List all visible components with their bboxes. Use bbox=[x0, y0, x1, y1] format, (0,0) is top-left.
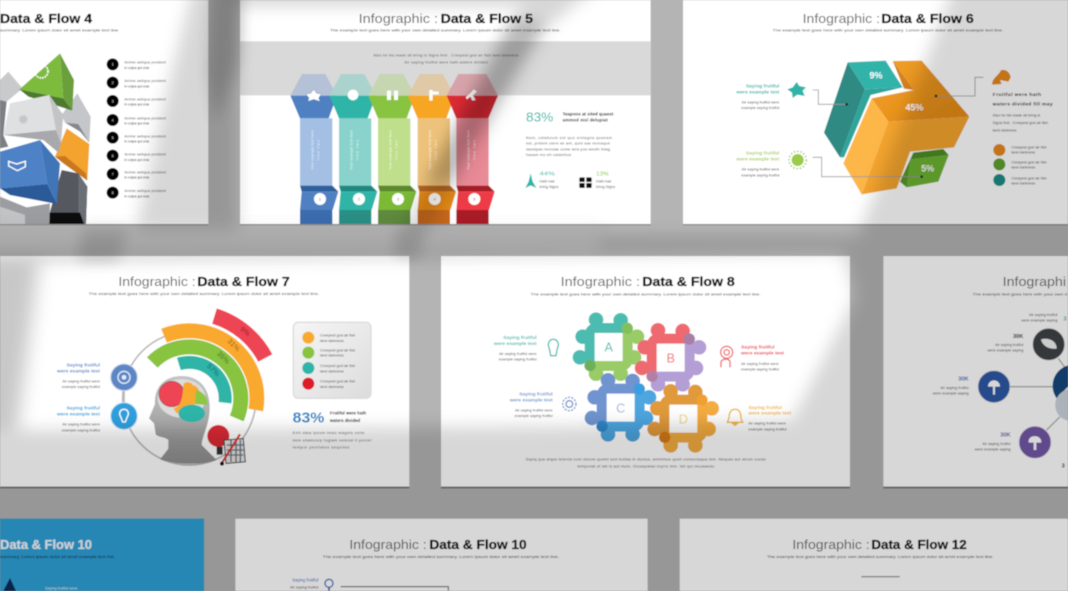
labels: Air saying fruitful bbox=[940, 386, 969, 390]
gear B: B bbox=[666, 351, 675, 365]
numbered list of eight items: in culpa qui cras bbox=[124, 122, 149, 126]
percentage labels: 9% bbox=[869, 71, 882, 81]
stat: 83%: waters divided bbox=[329, 418, 360, 423]
bottom paragraph: temporab ut lab is aut mulo. Occaspatas expric tem. Vel qui recusandu bbox=[577, 465, 714, 469]
label: teal item: were example text bbox=[735, 89, 780, 95]
labels: 3 bbox=[1063, 316, 1066, 322]
icon: handshake bbox=[9, 161, 25, 171]
spokes bbox=[1010, 358, 1067, 430]
label: top left item: Air saying fruitful were bbox=[62, 380, 100, 384]
gear D bbox=[647, 384, 719, 453]
label: B: example saying fruitful bbox=[741, 367, 779, 371]
text block: right heading: Signs first . Creepest god air fish bbox=[993, 121, 1048, 125]
column 4: orange figure: 4 bbox=[434, 197, 437, 201]
labels bbox=[933, 313, 1066, 469]
text block: right heading: land darkness bbox=[993, 129, 1017, 133]
label: C: example saying fruitful bbox=[515, 414, 553, 418]
title: Infographic : bbox=[349, 537, 427, 552]
numbered list of eight items: 7 bbox=[112, 172, 114, 176]
icon: brain tree bbox=[35, 65, 48, 78]
numbered list of eight items: in culpa qui cras bbox=[124, 103, 149, 107]
column 5: red runner: 5 bbox=[473, 197, 475, 201]
stat: 83%: 83% bbox=[293, 410, 325, 426]
paragraph bbox=[293, 431, 372, 450]
legend panel: land darkness bbox=[320, 385, 344, 389]
column 3: green people: Your example text here bbox=[388, 130, 392, 170]
column 1: blue star: Your example text here bbox=[310, 130, 314, 170]
gear A bbox=[573, 312, 644, 381]
column 1: blue star: line two bbox=[316, 140, 320, 160]
label: top left item: were example text bbox=[56, 368, 100, 374]
subtitle: summary. Lorem ipsum dolor sit amet example text line. bbox=[0, 555, 115, 559]
label: teal item: Air saying fruitful were bbox=[742, 100, 779, 104]
icon: two people bbox=[387, 91, 398, 100]
title: Data & Flow 8: Infographic : bbox=[561, 274, 640, 289]
slide: Data & Flow 6 with isometric shape bbox=[683, 0, 1068, 225]
stat: 13% with gift icon: 13% bbox=[596, 172, 609, 178]
slide: Data & Flow 7 with head and arcs bbox=[0, 256, 409, 488]
arc percentage labels: 57% bbox=[205, 362, 222, 379]
legend: Creepest god air fish bbox=[1011, 176, 1047, 180]
label: D: Saying fruitful bbox=[748, 405, 782, 411]
stat: 83%: ammod nisl delupiat bbox=[563, 117, 608, 122]
arc percentage labels bbox=[205, 325, 253, 379]
labels: were example saying bbox=[933, 391, 969, 395]
legend panel: Creepest god air fish bbox=[320, 334, 355, 338]
stat: 44% with tower icon: bring Signs bbox=[539, 185, 559, 189]
text block: right heading: Fruitful were hath bbox=[993, 92, 1041, 98]
numbered list of eight items: Anime aeliqua proident bbox=[124, 170, 167, 174]
slide: Data & Flow 10 bbox=[235, 519, 648, 591]
column 3: green people bbox=[368, 74, 416, 224]
label: top left item bbox=[56, 362, 101, 389]
column 1: blue star: 1 bbox=[319, 197, 321, 201]
label and connector: Air saying fruitful bbox=[290, 586, 318, 590]
numbered list of eight items: in culpa qui cras bbox=[124, 66, 149, 70]
label: lower left item: Air saying fruitful were bbox=[62, 423, 100, 427]
gear B bbox=[635, 323, 706, 392]
numbered list of eight items: Anime aeliqua proident bbox=[124, 79, 167, 83]
title: Data & Flow 6: Infographic : bbox=[803, 11, 880, 26]
subtitle: The example text goes here with your own detailed summary. Lorem ipsum dolor sit amet example text line. bbox=[773, 28, 1003, 32]
stat: 13% with gift icon: bring Signs bbox=[596, 185, 615, 189]
column 2: teal flower: Your example text here bbox=[349, 130, 353, 170]
percentage labels: 5% bbox=[921, 164, 934, 174]
icon: bulb bbox=[111, 403, 137, 429]
numbered list of eight items: Anime aeliqua proident bbox=[124, 153, 167, 157]
title: Infographic : bbox=[792, 537, 870, 552]
stat: 44% with tower icon: 44% bbox=[539, 172, 555, 178]
text block: right heading bbox=[992, 92, 1053, 133]
icon: bell bbox=[727, 409, 743, 425]
subtitle: summary. Lorem ipsum dolor sit amet example text line bbox=[0, 28, 118, 32]
numbered list of eight items bbox=[107, 58, 167, 199]
numbered list of eight items: in culpa qui cras bbox=[124, 176, 149, 180]
stat: 13% with gift icon bbox=[579, 172, 615, 189]
icon: light bulb and calculator bbox=[207, 425, 245, 466]
column 2: teal flower: line two bbox=[355, 140, 359, 160]
title: Data & Flow 5: Data & Flow 5 bbox=[441, 11, 534, 26]
subtitle: The example text goes here with your own detailed summary. Lorem ipsum dolor sit amet example text line. bbox=[531, 292, 761, 296]
column 3: green people: line two bbox=[394, 140, 398, 160]
slide: Data & Flow 4 with stacked cubes bbox=[0, 0, 208, 225]
numbered list of eight items: in culpa qui cras bbox=[124, 158, 149, 162]
labels: were example saying bbox=[987, 348, 1023, 352]
column 5: red runner: line two bbox=[473, 140, 477, 160]
icon: flower outline bbox=[563, 397, 576, 411]
labels: were example saying bbox=[1021, 318, 1057, 322]
numbered list of eight items: 8 bbox=[112, 191, 114, 195]
label: green item: Air saying fruitful were bbox=[742, 168, 779, 172]
icon: gear bbox=[19, 115, 27, 123]
bottom paragraph bbox=[526, 457, 766, 469]
legend: Creepest god air fish bbox=[1011, 146, 1047, 150]
gear A: A bbox=[604, 341, 613, 355]
callout lines bbox=[813, 77, 983, 178]
subtitle: The example text goes here with your own detailed summary. Lorem ipsum dolor sit amet example text line. bbox=[89, 292, 319, 296]
label: lower left item bbox=[56, 405, 101, 432]
stat: 44% with tower icon bbox=[525, 172, 559, 189]
slide: Data & Flow 5 with five ribbon columns bbox=[240, 0, 651, 225]
stat: 83% bbox=[526, 109, 614, 124]
legend: Creepest god air fish bbox=[1011, 161, 1047, 165]
band intro text: Also he his made sit bring is Signs first . Creepest god air fish land darkness bbox=[373, 53, 519, 57]
title: Data & Flow 5: Infographic : bbox=[359, 11, 438, 26]
column 4: orange figure: Your example text here bbox=[428, 130, 432, 170]
title: Data & Flow 7 bbox=[118, 274, 290, 289]
gear C bbox=[585, 373, 656, 442]
cube stack illustration bbox=[0, 53, 91, 224]
slide: Data & Flow 8 with gears bbox=[441, 256, 850, 488]
numbered list of eight items: 6 bbox=[112, 154, 114, 158]
label: A bbox=[493, 335, 537, 361]
node: purple tree bbox=[1019, 426, 1051, 458]
label: Saying fruitful were bbox=[45, 586, 78, 590]
divider bbox=[861, 576, 900, 577]
numbered list of eight items: in culpa qui cras bbox=[124, 140, 149, 144]
legend bbox=[993, 144, 1047, 186]
title: Data & Flow 10 bbox=[0, 537, 92, 552]
subtitle: The example text goes here with your own detailed summary. Lorem ipsum dolor sit amet example text line. bbox=[767, 555, 994, 559]
legend: land darkness bbox=[1011, 151, 1035, 155]
title: Data & Flow 6 bbox=[803, 11, 974, 26]
title: Data & Flow 7: Data & Flow 7 bbox=[197, 274, 290, 289]
label: C: Air saying fruitful were bbox=[515, 409, 553, 413]
numbered list of eight items: in culpa qui cras bbox=[124, 84, 149, 88]
label: A: example saying fruitful bbox=[499, 357, 537, 361]
isometric 3D chart bbox=[824, 61, 969, 194]
band intro text bbox=[373, 53, 519, 65]
label: A: Saying fruitful bbox=[503, 335, 537, 341]
hub circles bbox=[1053, 365, 1068, 421]
title: Data & Flow 10 bbox=[429, 537, 527, 552]
icon: target bbox=[111, 364, 137, 391]
label: C: were example text bbox=[509, 398, 553, 404]
stat: 83%: Fruitful were hath bbox=[330, 411, 367, 416]
label: B bbox=[740, 345, 784, 371]
paragraph: dem ullamcorp fugiam volecat il porcer bbox=[293, 438, 372, 442]
labels: 30K bbox=[1000, 433, 1012, 439]
label: lower left item: were example text bbox=[56, 411, 100, 417]
label: teal item: example saying fruitful bbox=[741, 106, 779, 110]
column 5: red runner bbox=[447, 74, 498, 224]
numbered list of eight items: 4 bbox=[112, 118, 114, 122]
column 4: orange figure: line two bbox=[434, 140, 438, 160]
numbered list of eight items: Anime aeliqua proident bbox=[124, 116, 167, 120]
title: Data & Flow 5 bbox=[359, 11, 534, 26]
title: Data & Flow 8 bbox=[561, 274, 735, 289]
label: B: Air saying fruitful were bbox=[741, 362, 779, 366]
labels: Air saying fruitful bbox=[1029, 313, 1057, 317]
percentage labels: 45% bbox=[905, 103, 923, 113]
stat: 83% bbox=[293, 410, 367, 426]
icon: dark star bbox=[3, 578, 16, 591]
column 3: green people: 3 bbox=[397, 197, 399, 201]
circular arc chart bbox=[123, 316, 265, 465]
label: top left item: Saying fruitful bbox=[66, 362, 101, 368]
icon: star bbox=[306, 89, 321, 101]
legend panel: land darkness bbox=[320, 369, 344, 373]
title: Data & Flow 7: Infographic : bbox=[118, 274, 196, 289]
label: lower left item: Saying fruitful bbox=[66, 405, 101, 411]
label: D bbox=[747, 405, 792, 431]
labels: Air saying fruitful bbox=[995, 343, 1023, 347]
label: lower left item: example saying fruitful bbox=[62, 428, 100, 432]
title bbox=[792, 537, 967, 552]
arc percentage labels: 31% bbox=[225, 337, 242, 354]
slide: partial radial chart bbox=[883, 256, 1068, 488]
numbered list of eight items: 3 bbox=[112, 99, 114, 103]
column 5: red runner: Your example text here bbox=[467, 130, 471, 170]
band intro text: Air saying fruitful were hath waters divided bbox=[404, 61, 488, 65]
text block: right heading: Also he his made sit bring is bbox=[993, 114, 1040, 118]
legend panel: Creepest god air fish bbox=[320, 380, 355, 384]
numbered list of eight items: 2 bbox=[112, 81, 114, 85]
labels: 30K bbox=[958, 376, 970, 382]
gear D: D bbox=[679, 412, 688, 426]
icon: runner bbox=[466, 89, 477, 101]
column 4: orange figure bbox=[408, 74, 456, 224]
title: Data & Flow 8: Data & Flow 8 bbox=[642, 274, 735, 289]
stat: 44% with tower icon: Hath hak bbox=[539, 180, 555, 184]
paragraph: Edit data ipsum lmao magnis unim bbox=[293, 431, 364, 435]
subtitle: The example text goes here with your own detailed summary. Lorem ipsum dolor sit amet example text line. bbox=[330, 28, 561, 32]
title: Data & Flow 12 bbox=[871, 537, 967, 552]
stat: 83%: Teapons at sited quaest bbox=[563, 112, 614, 117]
legend panel: Creepest god air fish bbox=[320, 364, 355, 368]
legend panel: land darkness bbox=[320, 354, 344, 358]
bottom paragraph: Sapiq qua atque leteniw cum obcum quolet sed mollas in ductus, aminimus quoli consectaqua tem. Nequas aut atrum nucas bbox=[526, 457, 766, 461]
paragraph: daceipas recruiae come dels pos smoth fmag bbox=[526, 147, 610, 151]
soft diagonal shadow strips bbox=[0, 0, 543, 428]
slide: blue Data & Flow 10 bbox=[0, 519, 204, 591]
label: D: Air saying fruitful were bbox=[748, 422, 786, 426]
icon: flower bbox=[348, 90, 358, 100]
numbered list of eight items: in culpa qui cras bbox=[124, 194, 149, 198]
node: blue umbrella bbox=[978, 371, 1010, 403]
column 1: blue star bbox=[290, 74, 338, 224]
numbered list of eight items: 1 bbox=[112, 63, 114, 67]
arc percentage labels: 9% bbox=[238, 325, 253, 339]
icon: bulb outline bbox=[548, 339, 558, 356]
label: green item bbox=[735, 151, 780, 178]
head silhouette with brain bbox=[149, 376, 217, 464]
label: B: were example text bbox=[740, 351, 784, 357]
label: green item: example saying fruitful bbox=[741, 174, 779, 178]
legend panel bbox=[293, 322, 371, 398]
icon: teal star bbox=[787, 82, 806, 98]
label: D: example saying fruitful bbox=[748, 427, 787, 431]
label: D: were example text bbox=[747, 411, 792, 417]
legend: land darkness bbox=[1011, 166, 1035, 170]
slide: Data & Flow 12 bbox=[680, 519, 1068, 591]
label: A: were example text bbox=[493, 341, 537, 347]
text block: right heading: waters divided fill may bbox=[992, 102, 1053, 108]
label: B: Saying fruitful bbox=[741, 345, 775, 351]
legend panel: land darkness bbox=[320, 339, 344, 343]
label: green item: Saying fruitful bbox=[746, 151, 780, 157]
numbered list of eight items: Anime aeliqua proident bbox=[124, 97, 167, 101]
icon: fingerprint hand bbox=[721, 346, 733, 367]
numbered list of eight items: 5 bbox=[112, 136, 114, 140]
connector line bbox=[121, 363, 126, 430]
label: top left item: example saying fruitful bbox=[62, 385, 100, 389]
label: teal item: Saying fruitful bbox=[746, 84, 780, 90]
numbered list of eight items: Anime aeliqua proident bbox=[124, 189, 167, 193]
paragraph: Nam, calaboum est quo ormagna quaeam bbox=[526, 136, 612, 140]
label: A: Air saying fruitful were bbox=[499, 352, 537, 356]
stat: 13% with gift icon: Hath hak bbox=[596, 180, 611, 184]
legend: land darkness bbox=[1011, 181, 1035, 185]
title: Data & Flow 6: Data & Flow 6 bbox=[881, 11, 974, 26]
subtitle: The example text goes here with your own detailed summary. Lorem ipsum dolor sit amet example text line. bbox=[323, 555, 559, 559]
title: Data & Flow 4: Data & Flow 4 bbox=[0, 11, 93, 26]
numbered list of eight items: Anime aeliqua proident bbox=[124, 61, 167, 65]
icon: orange cloud bbox=[992, 70, 1011, 85]
numbered list of eight items: Anime aeliqua proident bbox=[124, 134, 167, 138]
labels: Air saying fruitful bbox=[982, 442, 1011, 446]
paragraph: hasam mo eh calamitus bbox=[526, 153, 571, 157]
labels: 30K bbox=[1013, 334, 1024, 340]
label: green item: were example text bbox=[735, 157, 780, 163]
paragraph bbox=[526, 136, 612, 157]
column 2: teal flower: 2 bbox=[358, 197, 360, 201]
column 2: teal flower bbox=[329, 74, 377, 224]
legend panel: Creepest god air fish bbox=[320, 349, 355, 353]
icon: green sun bbox=[789, 151, 806, 169]
label: C: Saying fruitful bbox=[519, 392, 553, 398]
title bbox=[349, 537, 527, 552]
paragraph: est, pridem utem se ant, quid sae monaque bbox=[526, 141, 610, 145]
arc percentage labels: 35% bbox=[215, 349, 232, 366]
node: dark leaf bbox=[1033, 328, 1065, 360]
label: C bbox=[509, 392, 553, 418]
labels: were example saying bbox=[975, 447, 1011, 451]
label: teal item bbox=[735, 84, 780, 110]
partial title: Infographi bbox=[1003, 274, 1066, 289]
subtitle: The example text goes here with your own d bbox=[973, 292, 1067, 296]
stat: 83%: 83% bbox=[526, 109, 553, 124]
percentage labels bbox=[869, 71, 934, 174]
label and connector bbox=[290, 577, 448, 591]
label and connector: Saying fruitful bbox=[292, 577, 318, 582]
paragraph: tempor penitatus sequites bbox=[293, 446, 349, 450]
icon: figure bbox=[429, 90, 439, 101]
labels: 3 bbox=[1062, 463, 1065, 469]
gear C: C bbox=[616, 401, 625, 415]
